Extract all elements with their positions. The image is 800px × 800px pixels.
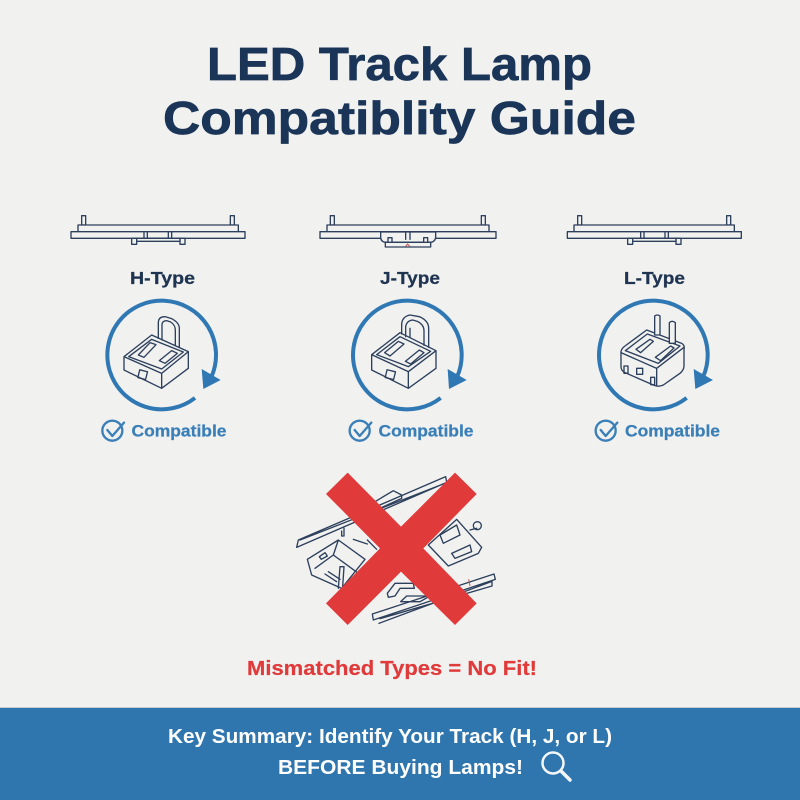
icon: H-type lamp base [124, 317, 188, 388]
icon: rotation arrow [353, 301, 467, 409]
icon: check mark [350, 421, 371, 441]
icon: magnifying glass [542, 752, 570, 780]
icon: J-type lamp base [372, 315, 436, 388]
icon: red X [326, 473, 477, 625]
heading: H-Type: H-Type [130, 268, 195, 288]
title: LED Track Lamp [207, 38, 592, 90]
icon: H-type track [71, 216, 245, 244]
summary banner [0, 707, 800, 800]
heading: L-Type: L-Type [624, 268, 685, 288]
summary text [168, 725, 612, 779]
icon: check mark [102, 421, 124, 441]
status: compatible: Compatible [625, 422, 720, 440]
icon: rotation arrow [599, 301, 713, 409]
panel: L-Type [567, 216, 741, 441]
panel: J-Type [320, 216, 496, 441]
icon: check mark [596, 421, 617, 441]
panel: H-Type [71, 216, 245, 441]
title: Compatiblity Guide [163, 92, 636, 144]
icon: L-type lamp base [621, 315, 684, 386]
illustration: jumbled tracks and lamps [297, 477, 495, 623]
icon: L-type track [567, 216, 741, 244]
icon: rotation arrow [107, 301, 221, 409]
status: compatible: Compatible [378, 422, 474, 440]
warning text: Mismatched Types = No Fit! [247, 658, 537, 680]
title [163, 38, 636, 144]
status: compatible: Compatible [132, 422, 226, 440]
panel: mismatched types [247, 473, 537, 680]
summary text: Key Summary: Identify Your Track (H, J, or L) [168, 725, 612, 748]
icon: J-type track [320, 216, 496, 247]
summary text: BEFORE Buying Lamps! [278, 756, 523, 779]
heading: J-Type: J-Type [380, 268, 440, 288]
